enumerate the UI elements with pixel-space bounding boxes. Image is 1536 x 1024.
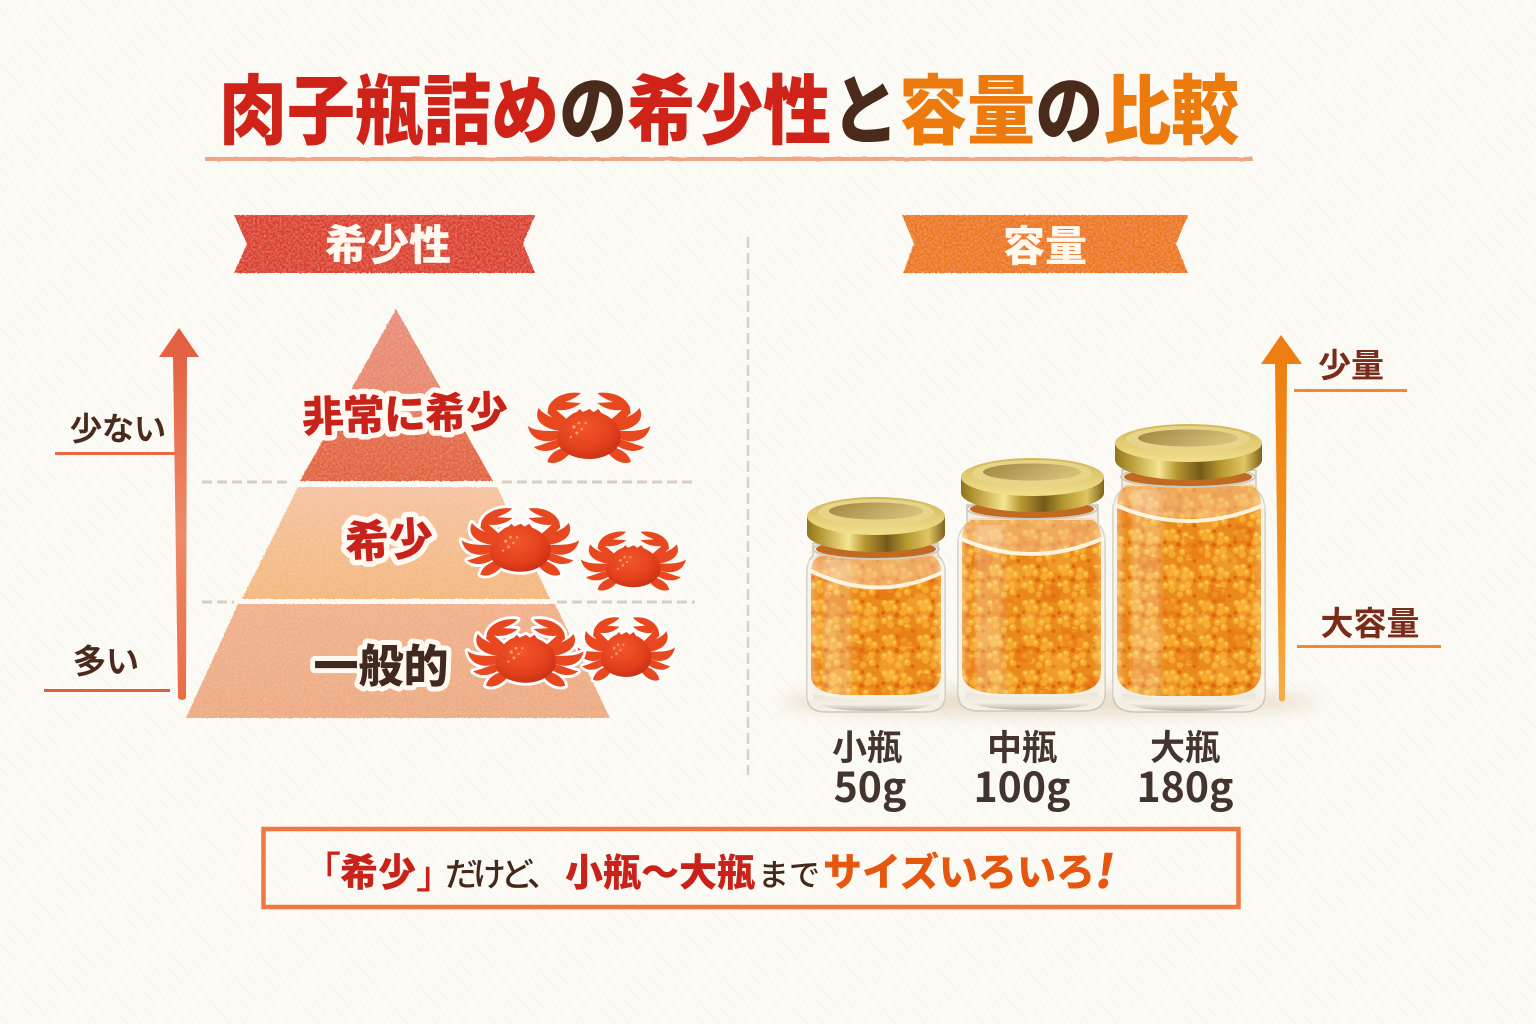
- icon: crab bottom tier back: [577, 617, 675, 681]
- jar label: large: 大瓶: [1150, 720, 1220, 771]
- tier label: 希少: 希少: [343, 503, 434, 571]
- center divider: [747, 237, 749, 775]
- tier dashed guides: [202, 482, 695, 602]
- section banner: 希少性: 希少性: [325, 212, 451, 273]
- tier label: 非常に希少: 非常に希少: [301, 378, 509, 445]
- panel: rarity pyramid: [186, 309, 695, 718]
- panel: jars: [780, 424, 1320, 716]
- jar label: medium: 100g: [973, 754, 1071, 814]
- icon: crab middle tier 1: [462, 508, 579, 576]
- jar label: small: [832, 720, 906, 814]
- tier label: 一般的: 一般的: [313, 630, 449, 695]
- jar: small: [807, 497, 945, 712]
- jar label: large: [1136, 720, 1234, 814]
- arrow: volume scale: [1261, 335, 1441, 702]
- scale label: 多い: 多い: [73, 635, 139, 683]
- jar label: large: 180g: [1136, 754, 1234, 814]
- pyramid tier: middle: [242, 487, 550, 599]
- icon: crab middle tier 2: [581, 531, 686, 591]
- scale label: 少ない: 少ない: [70, 404, 166, 450]
- jar: large: [1113, 424, 1265, 712]
- callout: !: [1091, 835, 1121, 902]
- callout: サイズいろいろ: [823, 842, 1095, 898]
- pyramid tier: bottom: [186, 604, 610, 718]
- callout: 「: [303, 840, 341, 895]
- arrow: rarity scale: [44, 328, 199, 700]
- callout: 」: [416, 844, 454, 899]
- scale label: 少量: 少量: [1318, 339, 1384, 387]
- icon: crab top tier: [528, 393, 650, 463]
- jar: medium: [958, 458, 1105, 711]
- jar label: medium: 中瓶: [987, 720, 1057, 771]
- section banner: 容量: 容量: [1003, 213, 1087, 274]
- callout: まで: [758, 850, 820, 895]
- jar shadow: [780, 688, 1320, 716]
- jar label: small: 小瓶: [832, 720, 902, 771]
- pyramid tier: top: [300, 309, 493, 481]
- jar label: small: 50g: [834, 754, 906, 814]
- section banner: 容量: [902, 213, 1188, 274]
- icon: crab bottom tier front: [468, 619, 584, 687]
- section banner: 希少性: [234, 212, 535, 273]
- callout: 希少: [340, 842, 416, 897]
- callout: 小瓶〜大瓶: [565, 842, 755, 897]
- jar label: medium: [973, 720, 1071, 814]
- title: 肉子瓶詰めの希少性と容量の比較: [219, 49, 1239, 160]
- scale label: 大容量: 大容量: [1320, 597, 1420, 645]
- callout: [264, 829, 1238, 907]
- callout: だけど、: [445, 848, 560, 896]
